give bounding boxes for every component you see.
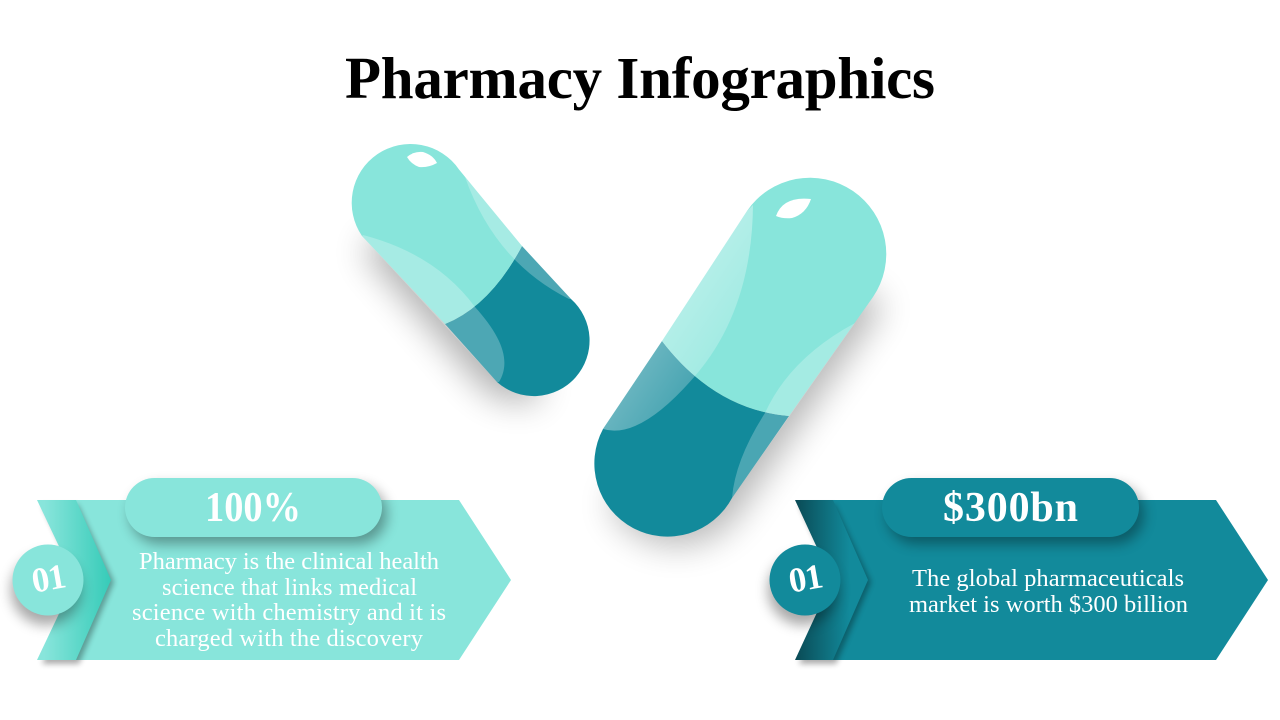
- stat pill: [125, 478, 382, 537]
- small capsule lower highlight: [362, 235, 504, 382]
- chevron: [37, 500, 111, 660]
- description: Pharmacy is the clinical health: [139, 548, 439, 575]
- small capsule glint: [407, 152, 437, 167]
- description: [909, 565, 1188, 618]
- small capsule dark half: [445, 246, 590, 396]
- stat pill: 100%: [205, 485, 301, 531]
- description: science with chemistry and it is: [132, 599, 446, 626]
- chevron: [795, 500, 868, 660]
- description: market is worth $300 billion: [909, 591, 1188, 618]
- title: Pharmacy Infographics: [345, 45, 935, 111]
- description: [132, 548, 446, 652]
- description: charged with the discovery: [155, 625, 424, 652]
- panel: $300bn: [768, 478, 1268, 664]
- small capsule shadow: [362, 225, 540, 402]
- number badge shadow: [768, 555, 838, 625]
- number badge: [12, 544, 84, 616]
- small capsule: [352, 144, 590, 402]
- small capsule light half: [352, 144, 522, 324]
- number badge shadow: [11, 555, 81, 625]
- stat pill: [882, 478, 1139, 537]
- stat pill: $300bn: [943, 485, 1078, 531]
- stat pill shadow: [887, 485, 1144, 544]
- panel: 100%: [11, 478, 511, 664]
- large capsule: [594, 178, 886, 545]
- banner body: [833, 500, 1268, 660]
- large capsule light half: [662, 178, 886, 416]
- stat pill shadow: [130, 485, 387, 544]
- banner body: [76, 500, 511, 660]
- large capsule shadow: [610, 260, 884, 545]
- description: science that links medical: [162, 574, 417, 601]
- large capsule glint: [776, 199, 811, 218]
- number badge: 01: [786, 556, 826, 601]
- number badge: 01: [29, 556, 69, 601]
- large capsule left highlight: [603, 205, 753, 431]
- chevron shadow: [42, 505, 114, 664]
- number badge: [770, 544, 840, 616]
- small capsule upper highlight: [465, 177, 571, 299]
- large capsule right highlight: [732, 323, 855, 498]
- chevron shadow: [799, 505, 871, 664]
- description: The global pharmaceuticals: [912, 565, 1184, 592]
- large capsule dark half: [594, 341, 789, 537]
